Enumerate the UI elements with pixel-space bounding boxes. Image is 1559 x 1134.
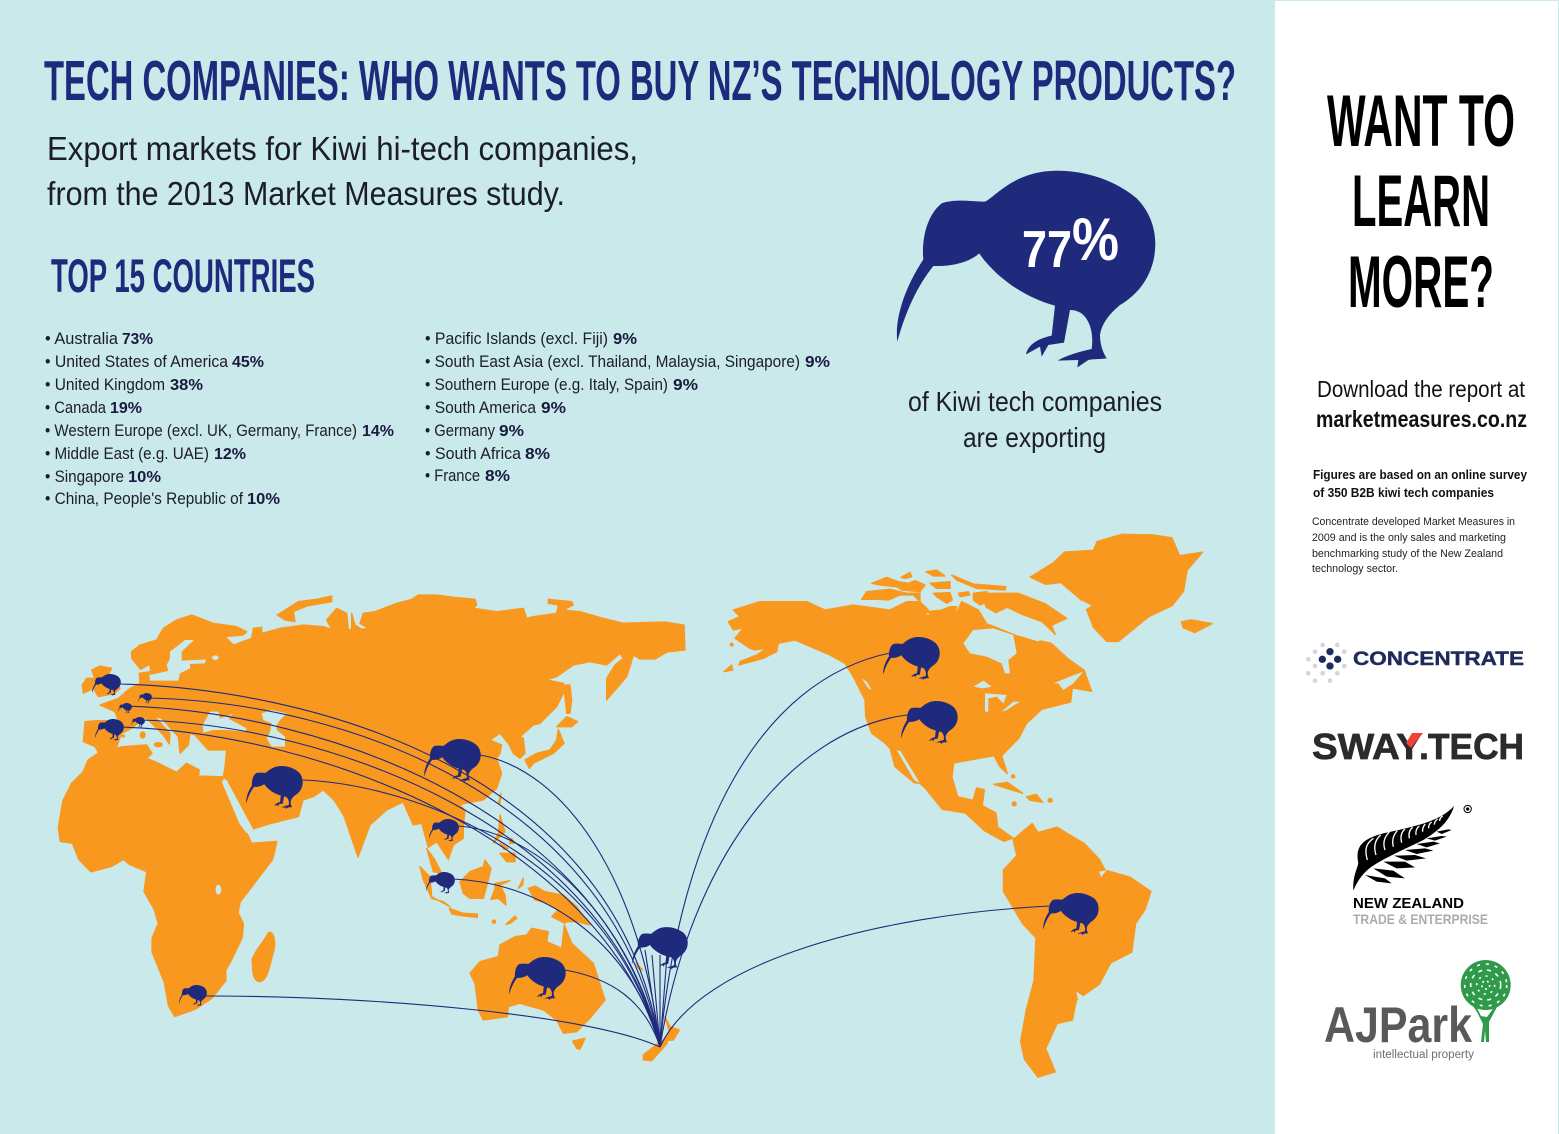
about text (1312, 516, 1515, 575)
country list: right column: 8% (485, 468, 510, 485)
country list: right column: • Pacific Islands (excl. Fiji) (425, 329, 608, 348)
country list: right column: • South America (425, 398, 536, 417)
map kiwi markers (92, 637, 1099, 1006)
country list: left column: • Canada (45, 398, 106, 417)
survey note: Figures are based on an online survey (1313, 468, 1527, 482)
stat: 77%: % (1072, 206, 1119, 273)
country list: right column: • France (425, 466, 480, 485)
country list: right column (425, 329, 830, 485)
country list: left column: 12% (214, 446, 246, 463)
survey note (1313, 468, 1527, 500)
logo: Sway.Tech: TECH (1428, 726, 1524, 767)
country list: left column: 73% (122, 331, 153, 348)
country list: left column: • United Kingdom (45, 375, 165, 394)
logo: Concentrate: CONCENTRATE (1353, 649, 1524, 670)
country list: left column: 38% (170, 377, 203, 394)
Africa and Madagascar (58, 745, 277, 1016)
callout: 77 percent kiwi (897, 171, 1162, 453)
logo: AJ Park: AJPark (1324, 997, 1472, 1053)
kiwi: Pacific Islands (632, 927, 688, 969)
logo: New Zealand Trade & Enterprise: NEW ZEALAND (1353, 895, 1464, 912)
caption: of Kiwi tech companies (908, 386, 1162, 417)
world map (58, 534, 1212, 1077)
kiwi: Canada (883, 637, 940, 680)
logo: New Zealand Trade & Enterprise: TRADE & ENTERPRISE (1353, 911, 1488, 927)
stat: 77%: 77 (1022, 221, 1072, 279)
country list: right column: 9% (673, 377, 698, 394)
export route lines to New Zealand (118, 653, 1049, 1047)
kiwi: Western Europe (95, 719, 124, 741)
Greenland, Iceland, Caribbean and South America (994, 534, 1212, 1077)
subtitle (47, 130, 638, 212)
kiwi: China (424, 739, 481, 782)
logo: AJ Park (1324, 960, 1511, 1061)
heading: top 15 countries: TOP 15 COUNTRIES (51, 249, 315, 302)
South East Asia, Australia and New Zealand (420, 811, 679, 1061)
country list: left column: 45% (232, 354, 264, 371)
country list: left column (45, 329, 394, 508)
download link text: marketmeasures.co.nz (1316, 406, 1527, 432)
kiwi: South East Asia (429, 819, 459, 842)
country list: right column: • Southern Europe (e.g. Italy, Spain) (425, 375, 668, 394)
logo: Sway.Tech (1312, 726, 1524, 767)
kiwi: Singapore (426, 872, 455, 894)
kiwi: United Kingdom (92, 674, 121, 696)
country list: right column: • South East Asia (excl. Thailand, Malaysia, Singapore) (425, 352, 800, 371)
country list: right column: 8% (525, 446, 550, 463)
kiwi: Germany (138, 693, 152, 704)
country list: left column: 10% (247, 491, 280, 508)
subtitle: Export markets for Kiwi hi-tech companies, (47, 130, 638, 167)
kiwi: France (118, 703, 132, 714)
stat: 77% (1022, 206, 1119, 279)
country list: right column: 9% (499, 423, 524, 440)
kiwi: Italy (131, 717, 145, 728)
country list: right column: 9% (805, 354, 830, 371)
about text: technology sector. (1312, 563, 1398, 575)
about text: Concentrate developed Market Measures in (1312, 516, 1515, 528)
kiwi: USA (901, 701, 958, 744)
country list: right column: 9% (541, 400, 566, 417)
country list: left column: • Western Europe (excl. UK, Germany, France) (45, 421, 357, 440)
North America (724, 570, 1092, 841)
logo: Sway.Tech: . (1419, 726, 1429, 767)
logo: Concentrate (1306, 643, 1524, 683)
download link text (1316, 376, 1527, 432)
sidebar panel (1275, 1, 1558, 1134)
icon: large kiwi (897, 171, 1155, 367)
kiwi: South Africa (179, 985, 207, 1006)
country list: right column: 9% (613, 331, 637, 348)
country list: right column: • Germany (425, 421, 495, 440)
country list: left column: • United States of America (45, 352, 228, 371)
about text: 2009 and is the only sales and marketing (1312, 532, 1506, 544)
kiwi: Middle East (246, 766, 303, 809)
country list: left column: 14% (362, 423, 394, 440)
download link text: Download the report at (1317, 376, 1526, 402)
inland seas and lakes (149, 600, 1107, 1000)
kiwi: South America (1043, 893, 1099, 935)
logo: AJ Park: intellectual property (1373, 1049, 1474, 1061)
country list: left column: 10% (128, 469, 161, 486)
subtitle: from the 2013 Market Measures study. (47, 175, 565, 212)
sidebar heading: want to learn more (1327, 81, 1515, 323)
logo: New Zealand Trade & Enterprise (1353, 805, 1488, 927)
country list: left column: • Middle East (e.g. UAE) (45, 444, 209, 463)
country list: left column: 19% (110, 400, 142, 417)
caption (908, 386, 1162, 453)
kiwi: Australia (509, 957, 566, 1000)
country list: right column: • South Africa (425, 444, 522, 463)
country list: left column: • Australia (45, 329, 119, 348)
country list: left column: • Singapore (45, 467, 124, 486)
logo: Sway.Tech: SWAY (1312, 726, 1422, 767)
about text: benchmarking study of the New Zealand (1312, 548, 1503, 560)
Eurasia and Britain (82, 595, 685, 859)
country list: left column: • China, People's Republic of (45, 489, 243, 508)
survey note: of 350 B2B kiwi tech companies (1313, 486, 1494, 500)
caption: are exporting (963, 422, 1106, 453)
